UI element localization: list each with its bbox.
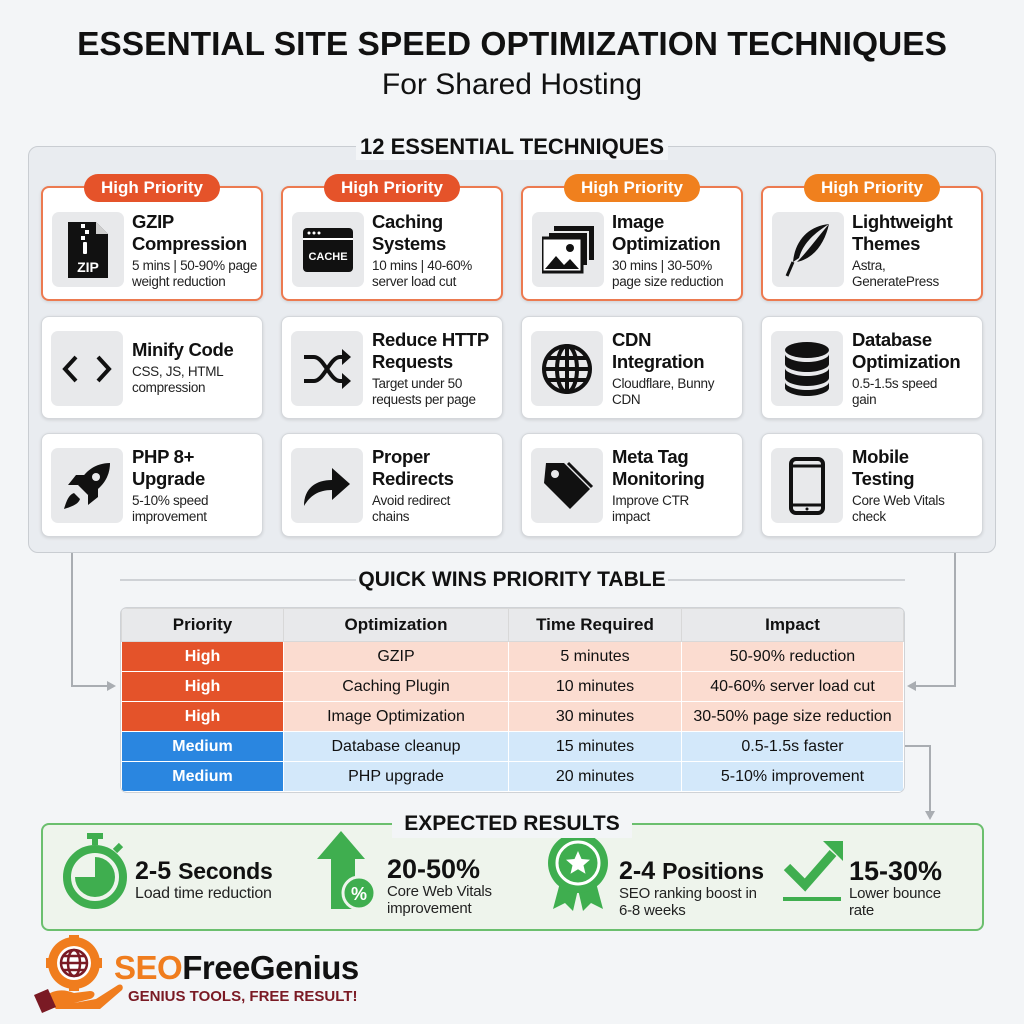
card: database: Database Optimization: [852, 329, 960, 372]
table: priority: 15 minutes: [556, 738, 634, 754]
icon: globe: [531, 331, 603, 406]
result: load time: 2-5 Seconds: [135, 857, 273, 885]
card: http: Reduce HTTP Requests: [372, 329, 489, 372]
icon: cache: CACHE: [308, 250, 348, 262]
card: themes: Lightweight Themes: [852, 211, 952, 254]
logo: SEOFreeGenius: SEOFreeGenius: [114, 949, 359, 986]
card: php: [41, 433, 263, 537]
table: priority: Image Optimization: [327, 708, 465, 724]
result: core web vitals: [317, 831, 492, 917]
card: redirects: Avoid redirect chains: [372, 493, 450, 524]
table: priority: [120, 607, 905, 793]
card: meta: Meta Tag Monitoring: [612, 446, 705, 489]
table: priority: 5 minutes: [560, 648, 630, 664]
table: priority: Time Required: [536, 615, 654, 634]
icon: database: [771, 331, 843, 406]
card: minify: CSS, JS, HTML compression: [132, 364, 223, 395]
result: seo ranking: SEO ranking boost in 6-8 weeks: [619, 885, 757, 919]
card: minify: [41, 316, 263, 419]
icon: zip: [52, 212, 124, 287]
table: priority: High: [185, 708, 220, 724]
badge: High Priority: [101, 178, 203, 197]
result: seo ranking: [548, 838, 764, 919]
table: priority: Medium: [172, 738, 233, 754]
table: priority: 0.5-1.5s faster: [741, 738, 844, 754]
result: bounce rate: [783, 841, 942, 919]
card: themes: Astra, GeneratePress: [852, 258, 939, 289]
table: priority: Database cleanup: [332, 738, 460, 754]
card: mobile: [761, 433, 983, 537]
card: cdn: CDN Integration: [612, 329, 704, 372]
table: priority: High: [185, 678, 220, 694]
icon: tags: [531, 448, 603, 523]
card: meta: Improve CTR impact: [612, 493, 689, 524]
badge: [84, 174, 220, 202]
card: caching: High Priority: [341, 178, 443, 197]
table: priority: 20 minutes: [556, 768, 634, 784]
card: image: 30 mins | 30-50% page size reduction: [612, 258, 723, 289]
card: themes: [761, 186, 983, 301]
result: core web vitals: 20-50%: [387, 854, 480, 884]
table: priority: 30 minutes: [556, 708, 634, 724]
card: themes: High Priority: [821, 178, 923, 197]
card: php: PHP 8+ Upgrade: [132, 446, 205, 489]
result: core web vitals: %: [351, 884, 367, 904]
table: priority: Optimization: [345, 615, 447, 634]
card: image: High Priority: [581, 178, 683, 197]
card: database: 0.5-1.5s speed gain: [852, 376, 937, 407]
table: priority: GZIP: [377, 648, 415, 664]
card: image: Image Optimization: [612, 211, 720, 254]
table: priority: High: [185, 648, 220, 664]
card: http: Target under 50 requests per page: [372, 376, 476, 407]
result: seo ranking: 2-4 Positions: [619, 857, 764, 885]
icon: code: [51, 331, 123, 406]
card: GZIP: 5 mins | 50-90% page weight reduction: [132, 258, 257, 289]
subtitle: For Shared Hosting: [382, 68, 642, 101]
table: priority: 10 minutes: [556, 678, 634, 694]
card: redirects: [281, 433, 503, 537]
panel: expected results: [41, 823, 984, 931]
table: priority: Impact: [765, 615, 820, 634]
card: GZIP: [41, 186, 263, 301]
card: caching: 10 mins | 40-60% server load cut: [372, 258, 472, 289]
card: caching: [281, 186, 503, 301]
logo: SEOFreeGenius: GENIUS TOOLS, FREE RESULT!: [128, 988, 357, 1005]
card: redirects: Proper Redirects: [372, 446, 454, 489]
card: php: 5-10% speed improvement: [132, 493, 208, 524]
title: ESSENTIAL SITE SPEED OPTIMIZATION TECHNIQUES: [77, 26, 947, 63]
logo: SEOFreeGenius: [34, 935, 359, 1013]
card: mobile: Mobile Testing: [852, 446, 914, 489]
table: priority: Caching Plugin: [342, 678, 450, 694]
icon: images: [532, 212, 604, 287]
table: priority: Medium: [172, 768, 233, 784]
card: mobile: Core Web Vitals check: [852, 493, 945, 524]
icon: feather: [772, 212, 844, 287]
card: image: [521, 186, 743, 301]
card: minify: Minify Code: [132, 339, 234, 360]
icon: cache: [292, 212, 364, 287]
card: cdn: [521, 316, 743, 419]
card: cdn: Cloudflare, Bunny CDN: [612, 376, 714, 407]
card: meta: [521, 433, 743, 537]
icon: shuffle: [291, 331, 363, 406]
result: bounce rate: Lower bounce rate: [849, 885, 941, 919]
card: http: [281, 316, 503, 419]
icon: redirect arrow: [291, 448, 363, 523]
table: priority: 30-50% page size reduction: [693, 708, 892, 724]
table: priority: Priority: [173, 615, 232, 634]
card: caching: Caching Systems: [372, 211, 446, 254]
panel: techniques: [28, 146, 996, 553]
heading: quick wins: QUICK WINS PRIORITY TABLE: [358, 568, 666, 591]
table: priority: PHP upgrade: [348, 768, 444, 784]
table: priority: 40-60% server load cut: [710, 678, 875, 694]
table: priority: 5-10% improvement: [721, 768, 864, 784]
result: bounce rate: 15-30%: [849, 856, 942, 886]
icon: phone: [771, 448, 843, 523]
result: load time: Load time reduction: [135, 885, 272, 902]
card: GZIP: GZIP Compression: [132, 211, 247, 254]
icon: zip: ZIP: [77, 258, 99, 274]
result: core web vitals: Core Web Vitals improvement: [387, 883, 492, 917]
heading: expected results: EXPECTED RESULTS: [404, 812, 620, 835]
icon: gear globe hand: [34, 935, 123, 1013]
table: priority: 50-90% reduction: [730, 648, 855, 664]
result: load time: [63, 833, 273, 909]
icon: rocket: [51, 448, 123, 523]
card: database: [761, 316, 983, 419]
heading: 12 essential techniques: 12 ESSENTIAL TECHNIQUES: [360, 134, 664, 159]
